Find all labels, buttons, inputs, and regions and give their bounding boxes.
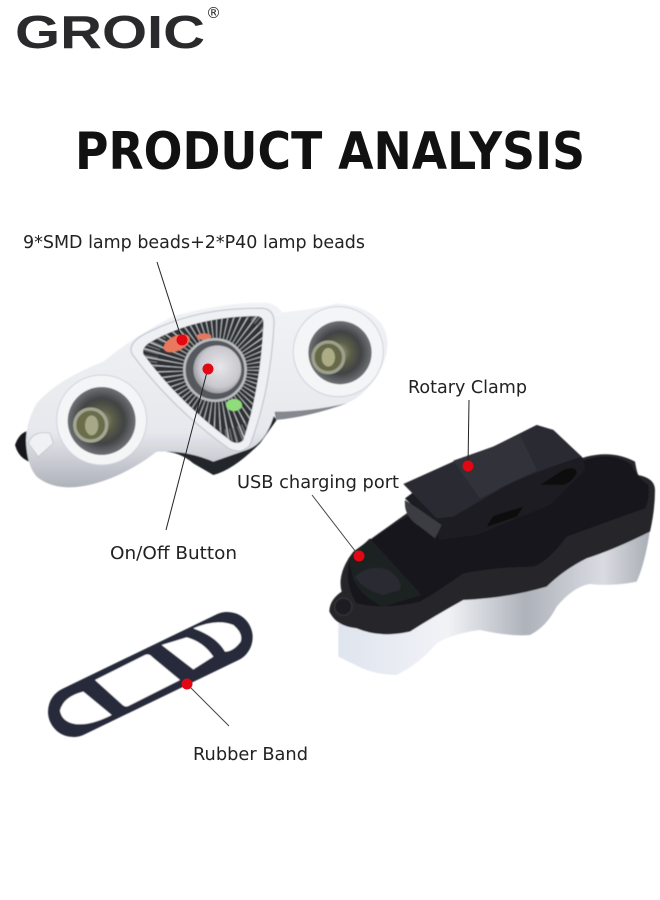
label: rotary clamp bbox=[408, 377, 527, 472]
title: PRODUCT ANALYSIS bbox=[75, 122, 585, 182]
rubber band bbox=[60, 622, 241, 724]
label: usb charging port bbox=[237, 472, 399, 562]
strap stub bbox=[15, 430, 43, 463]
label: rubber band bbox=[182, 678, 308, 765]
label: on/off button: On/Off Button bbox=[110, 543, 237, 564]
top face bbox=[348, 457, 649, 606]
silver base bbox=[338, 530, 650, 675]
left lens bbox=[57, 375, 147, 465]
lower shadow of body bbox=[147, 407, 277, 475]
label: SMD lamp beads bbox=[23, 232, 365, 346]
black shell bbox=[329, 454, 655, 634]
label: SMD lamp beads: 9*SMD lamp beads+2*P40 lamp beads bbox=[23, 232, 365, 253]
front light product bbox=[15, 290, 387, 487]
label: rotary clamp: Rotary Clamp bbox=[408, 377, 527, 398]
label: rubber band: Rubber Band bbox=[193, 744, 308, 765]
silver body bbox=[26, 303, 387, 487]
rotary clamp bbox=[403, 425, 585, 540]
rear light product bbox=[329, 425, 655, 675]
strap knob bbox=[28, 433, 53, 457]
right lens bbox=[293, 307, 383, 397]
triangular face with rays bbox=[142, 316, 264, 444]
label: usb charging port: USB charging port bbox=[237, 472, 399, 493]
logo: ® bbox=[206, 4, 221, 22]
label: on/off button bbox=[110, 364, 237, 564]
red lamp glow bbox=[163, 334, 191, 354]
power button bbox=[184, 339, 246, 401]
logo: GROIC bbox=[15, 6, 205, 58]
triangular housing bbox=[131, 308, 274, 451]
green lamp glow bbox=[226, 399, 242, 411]
screw lug bbox=[335, 598, 352, 615]
usb cover bbox=[348, 538, 422, 607]
